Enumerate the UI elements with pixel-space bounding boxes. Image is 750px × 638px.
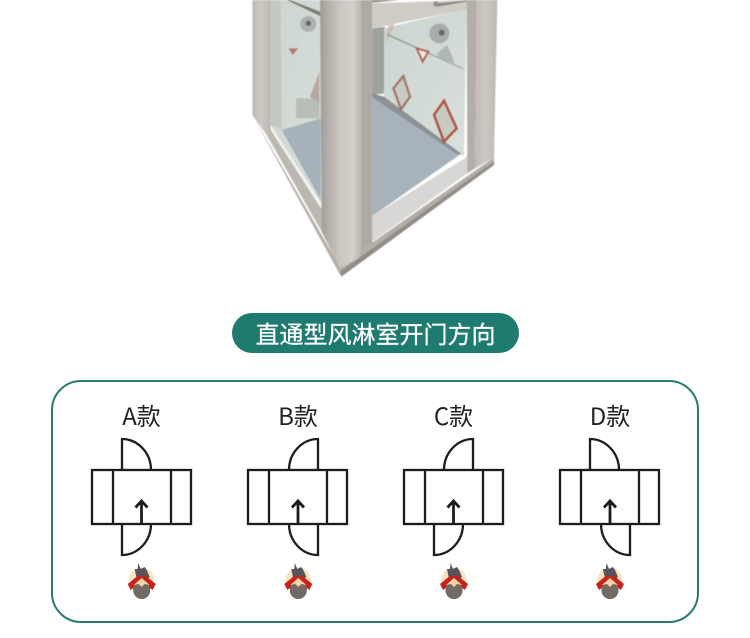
icon: person D: [596, 563, 624, 599]
right frame and post: [467, 0, 477, 173]
right door frame: [361, 0, 372, 251]
diagram: A款 doors: [92, 439, 191, 555]
diagram: D款 doors: [560, 439, 659, 555]
right glass details: [429, 23, 449, 43]
label: A款: A款: [122, 397, 161, 432]
left glass: [271, 0, 323, 207]
right floor: [372, 95, 462, 216]
icon: person B: [284, 563, 312, 599]
right threshold: [372, 157, 467, 242]
right glass: [384, 8, 467, 157]
heading pill: 直通型风淋室开门方向: [256, 315, 496, 350]
label: B款: B款: [278, 397, 318, 432]
left outer post: [252, 0, 271, 135]
panel: door direction options: [51, 380, 699, 623]
left floor: [282, 118, 321, 200]
icon: person C: [440, 563, 468, 599]
center post: [320, 0, 361, 268]
left threshold: [267, 126, 322, 232]
diagram: C款 doors: [404, 439, 503, 555]
door top bar: [372, 0, 470, 28]
base edge: [252, 115, 494, 277]
icon: person A: [128, 563, 156, 599]
diagram: B款 doors: [248, 439, 347, 555]
left glass details: [300, 16, 316, 32]
label: C款: C款: [434, 397, 473, 432]
label: D款: D款: [590, 397, 630, 432]
right back frame: [372, 27, 385, 95]
product photo: air shower cabin: [252, 0, 498, 277]
